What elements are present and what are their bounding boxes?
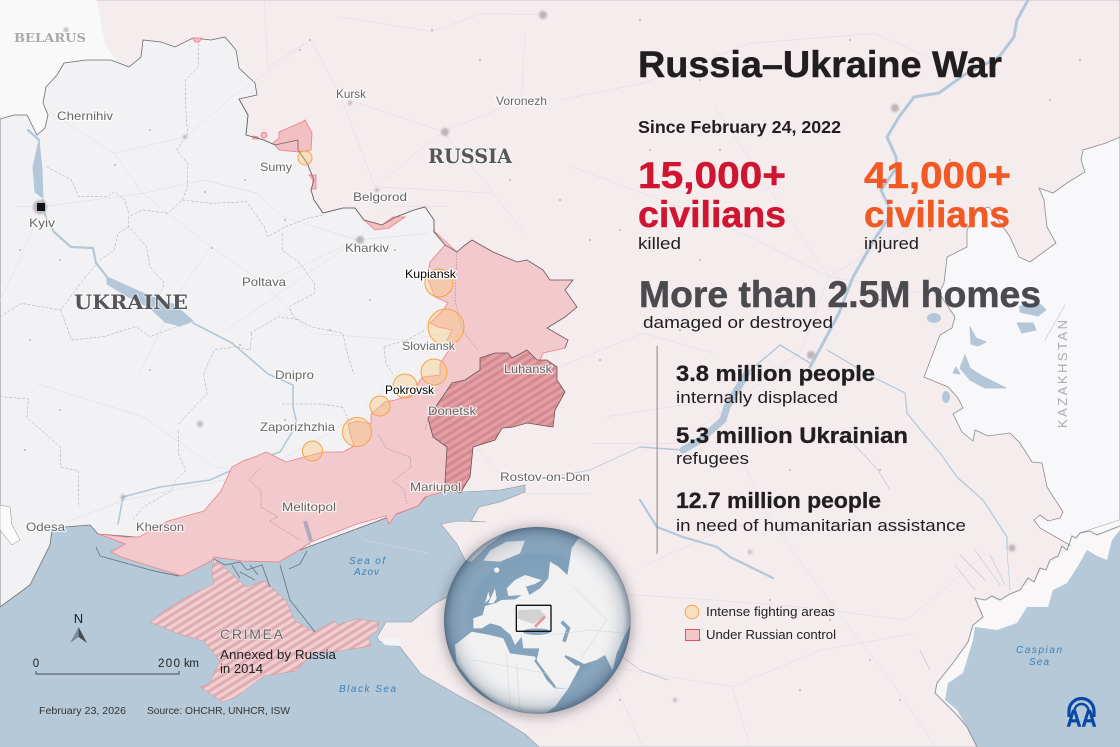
label: Belgorod: Belgorod — [353, 190, 407, 204]
label: Mariupol: Mariupol — [410, 480, 461, 494]
map: Belarus land — [0, 0, 118, 135]
map: Kazakhstan land — [924, 137, 1120, 547]
map: occupied southern and eastern Ukraine — [98, 230, 577, 576]
label: Caspian Sea — [1016, 645, 1062, 668]
icon: north arrow — [70, 611, 87, 643]
label: CRIMEA: CRIMEA — [220, 626, 284, 642]
map: intense fighting circles — [298, 151, 464, 461]
map: Caspian white shoreline — [935, 520, 1120, 720]
map: Molochna lake — [305, 521, 311, 541]
label: Kherson: Kherson — [136, 520, 184, 534]
stat: civilians killed — [638, 155, 786, 253]
label: Sloviansk: Sloviansk — [402, 339, 456, 353]
label: Zaporizhzhia: Zaporizhzhia — [260, 420, 335, 434]
stat: internally displaced: internally displaced — [676, 388, 838, 407]
label: KAZAKHSTAN: KAZAKHSTAN — [1055, 320, 1070, 428]
icon: AA logo: AA — [1066, 706, 1096, 732]
stat: civilians killed: killed — [638, 234, 681, 253]
callout: annexed by Russia: Annexed by Russia — [220, 647, 337, 662]
map: oblast borders — [0, 43, 425, 547]
label: Odesa: Odesa — [26, 520, 65, 534]
map: lakes in Kazakhstan — [928, 304, 1046, 402]
label: BELARUS: BELARUS — [14, 30, 86, 45]
label: Rostov-on-Don: Rostov-on-Don — [500, 470, 590, 484]
label: Sea of Azov — [349, 556, 386, 578]
label: Sea of Azov: Sea of — [349, 556, 386, 567]
globe locator — [444, 527, 637, 714]
stat: internally displaced — [676, 361, 875, 407]
map: Ukraine-Russia border overlay — [239, 99, 577, 348]
icon: north arrow: N — [74, 611, 83, 626]
subtitle: Since February 24, 2022 — [638, 117, 841, 137]
label: Chernihiv: Chernihiv — [57, 109, 113, 123]
stat: refugees: 5.3 million Ukrainian — [676, 423, 908, 448]
stat: homes damaged: damaged or destroyed — [643, 313, 833, 332]
map: Caspian shoreline — [935, 526, 1120, 747]
label: Pokrovsk: Pokrovsk — [385, 383, 435, 397]
callout: annexed by Russia — [220, 647, 337, 676]
footer: date: February 23, 2026 — [39, 705, 126, 717]
label: Sea of Azov: Azov — [353, 567, 380, 578]
label: Kupiansk: Kupiansk — [405, 267, 457, 281]
label: Donetsk: Donetsk — [428, 404, 477, 418]
stat: internally displaced: 3.8 million people — [676, 361, 875, 386]
globe shadow — [442, 527, 632, 717]
label: Voronezh: Voronezh — [496, 94, 547, 108]
map: Ukraine land — [0, 37, 457, 607]
map: Kyiv marker — [37, 203, 45, 211]
map: Sivash shoreline — [96, 547, 315, 632]
stat: homes damaged: More than 2.5M homes — [639, 274, 1041, 315]
map: Moldova patch — [0, 505, 20, 545]
vertical rule — [657, 346, 658, 554]
label: Dnipro: Dnipro — [275, 368, 314, 382]
map: Caspian Sea — [945, 530, 1120, 747]
stat: civilians injured: 41,000+ — [864, 155, 1011, 196]
label: Luhansk: Luhansk — [504, 362, 553, 376]
label: Kharkiv: Kharkiv — [345, 241, 389, 255]
stat: civilians injured: injured — [864, 234, 919, 253]
scale bar — [33, 658, 199, 674]
stat: refugees — [676, 423, 908, 468]
title: Russia–Ukraine War — [638, 44, 1002, 85]
scale bar: 0 — [33, 658, 39, 670]
label: UKRAINE: UKRAINE — [74, 290, 188, 314]
scale bar: km — [184, 658, 199, 670]
callout: annexed by Russia: in 2014 — [220, 661, 263, 676]
legend: Intense fighting areas — [706, 605, 835, 619]
label: Black Sea: Black Sea — [339, 684, 396, 695]
map: Russian-held pockets in Kursk and Belgorod border — [193, 38, 405, 230]
map: occupied oblast borders — [249, 252, 478, 540]
label: Caspian Sea: Sea — [1029, 657, 1049, 668]
stat: civilians killed: civilians — [638, 194, 786, 235]
scale bar: 200 — [158, 658, 180, 670]
label: Kursk: Kursk — [336, 87, 367, 101]
stat: humanitarian assistance: 12.7 million people — [676, 488, 881, 513]
stat: civilians killed: 15,000+ — [638, 155, 786, 196]
map: Donetsk and Luhansk annexed area — [428, 350, 565, 493]
legend: Under Russian control — [706, 628, 836, 642]
stat: humanitarian assistance: in need of humanitarian assistance — [676, 516, 966, 535]
map: Taman peninsula patch — [380, 637, 405, 646]
legend — [685, 605, 836, 642]
stat: civilians injured: civilians — [864, 194, 1010, 235]
label: Caspian Sea: Caspian — [1016, 645, 1062, 656]
map: Crimea — [150, 559, 379, 702]
footer: source: Source: OHCHR, UNHCR, ISW — [147, 705, 290, 717]
label: RUSSIA: RUSSIA — [428, 144, 512, 168]
stat: humanitarian assistance — [676, 488, 966, 535]
label: Sumy: Sumy — [260, 160, 292, 174]
label: Kyiv: Kyiv — [29, 216, 55, 230]
label: Poltava: Poltava — [242, 275, 286, 289]
stat: refugees: refugees — [676, 449, 749, 468]
stat: civilians injured — [864, 155, 1011, 253]
label: Melitopol: Melitopol — [282, 500, 336, 514]
